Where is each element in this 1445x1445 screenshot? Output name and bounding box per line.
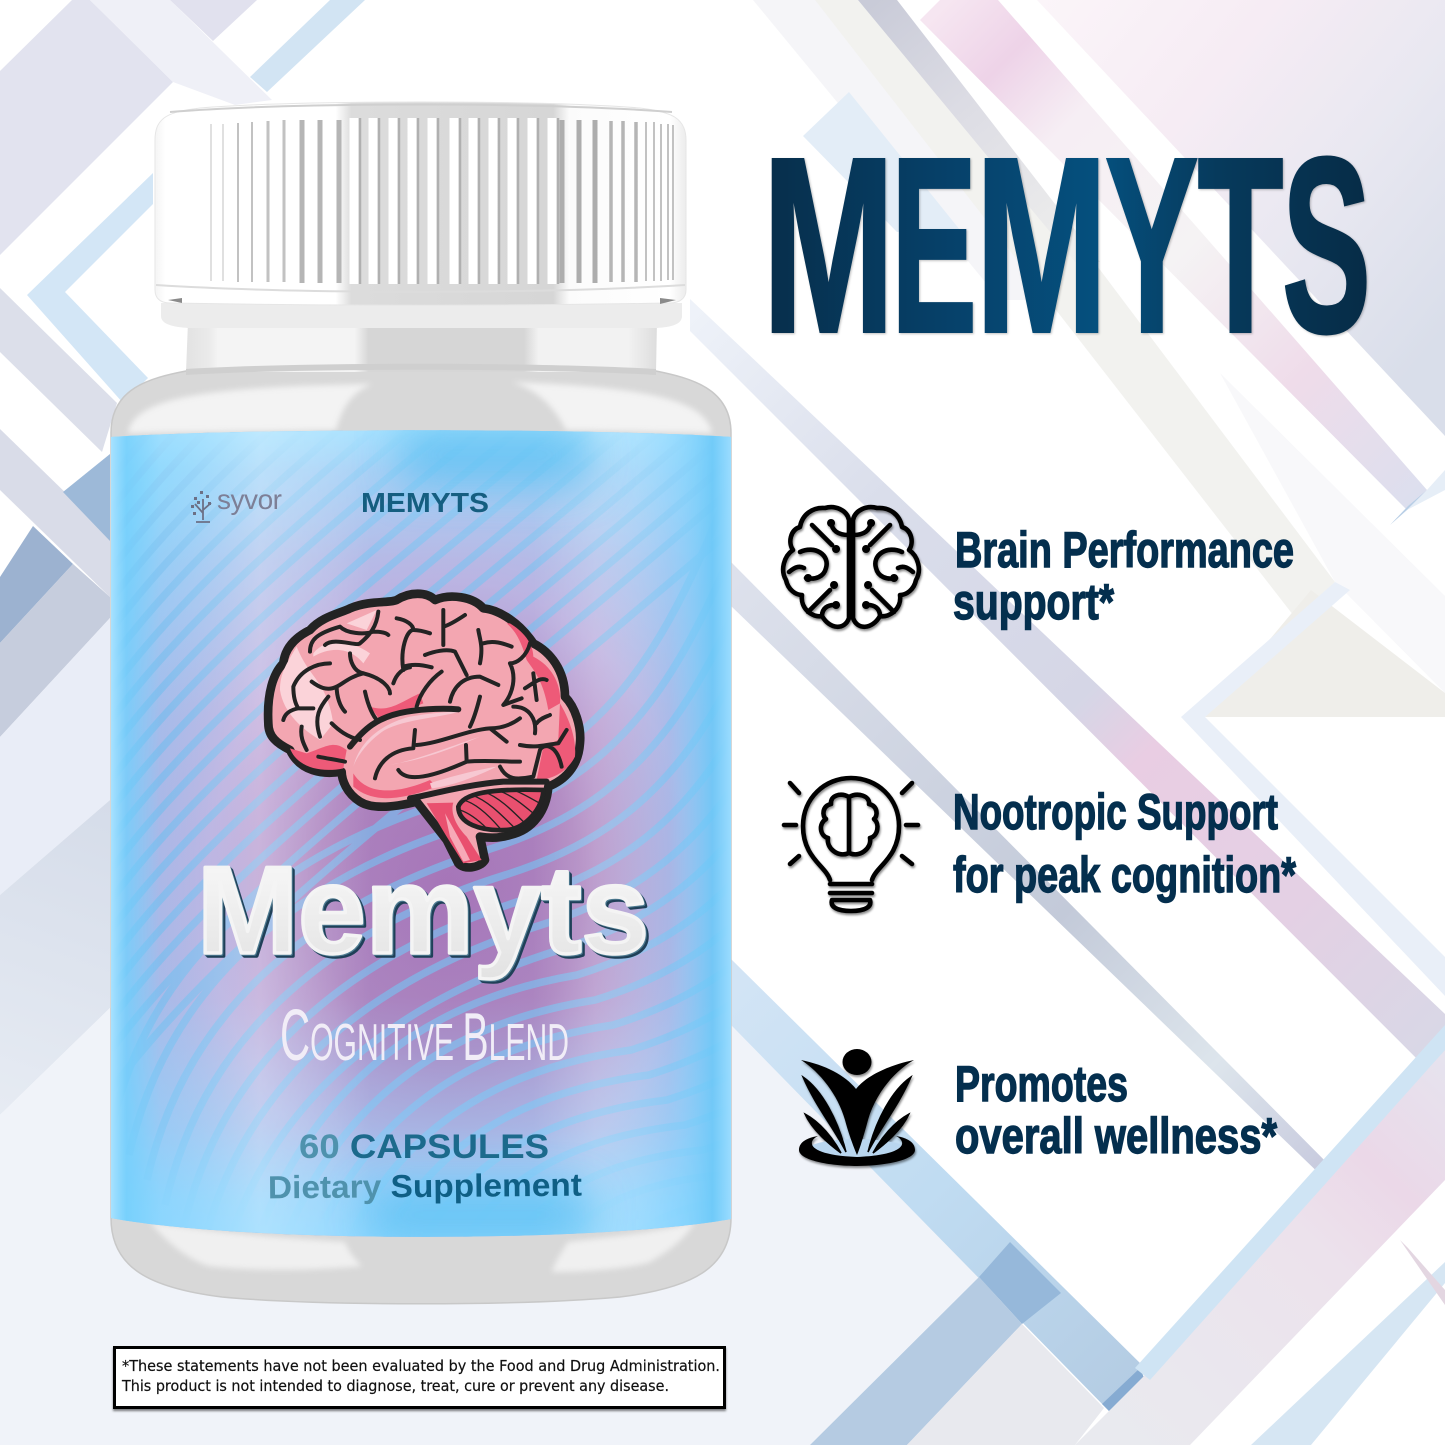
- label: syvor logo: syvor: [217, 484, 282, 515]
- label: cognitive blend: COGNITIVE BLEND: [280, 996, 569, 1076]
- label: brand name small: MEMYTS: [361, 487, 489, 518]
- label: dietary supplement: Dietary Supplement: [268, 1167, 582, 1205]
- title: S: [1282, 106, 1371, 384]
- label: brain illustration: [268, 594, 580, 867]
- disclaimer box: [114, 1348, 724, 1408]
- icon: light bulb with brain: [784, 778, 918, 911]
- disclaimer box: *These statements have not been evaluated by the Food and Drug Administration.: [122, 1357, 720, 1375]
- feature text: overall wellness: [955, 1056, 1277, 1164]
- shoulder highlights: [128, 382, 712, 433]
- icon: circuit brain: [783, 507, 919, 627]
- neck: [186, 322, 657, 372]
- feature text: nootropic support: Nootropic Support: [953, 784, 1278, 840]
- feature text: overall wellness: Promotes: [955, 1056, 1128, 1112]
- feature text: overall wellness: overall wellness*: [955, 1108, 1277, 1164]
- cap: [155, 102, 686, 305]
- feature text: nootropic support: [953, 784, 1296, 903]
- feature text: brain performance: [953, 522, 1294, 630]
- product bottle: [110, 102, 732, 1304]
- label background with swirl stripes: [111, 430, 731, 1237]
- feature text: brain performance: support*: [953, 574, 1114, 630]
- feature text: brain performance: Brain Performance: [955, 522, 1294, 578]
- title: E: [891, 106, 977, 384]
- base highlights: [150, 1222, 695, 1272]
- label: syvor logo: [191, 484, 282, 522]
- label: product name: Memyts: [197, 842, 649, 980]
- title: Y: [1105, 106, 1198, 384]
- title: T: [1198, 106, 1284, 384]
- title: M: [975, 106, 1108, 384]
- neck ring: [161, 303, 682, 328]
- label: capsule count: 60 CAPSULES: [299, 1128, 549, 1166]
- bottle body: [111, 371, 731, 1304]
- disclaimer box: This product is not intended to diagnose, treat, cure or prevent any disease.: [121, 1377, 669, 1395]
- feature text: nootropic support: for peak cognition*: [953, 847, 1296, 903]
- title: M: [762, 106, 895, 384]
- cap ribs: [211, 118, 673, 284]
- icon: wellness figure: [799, 1049, 915, 1166]
